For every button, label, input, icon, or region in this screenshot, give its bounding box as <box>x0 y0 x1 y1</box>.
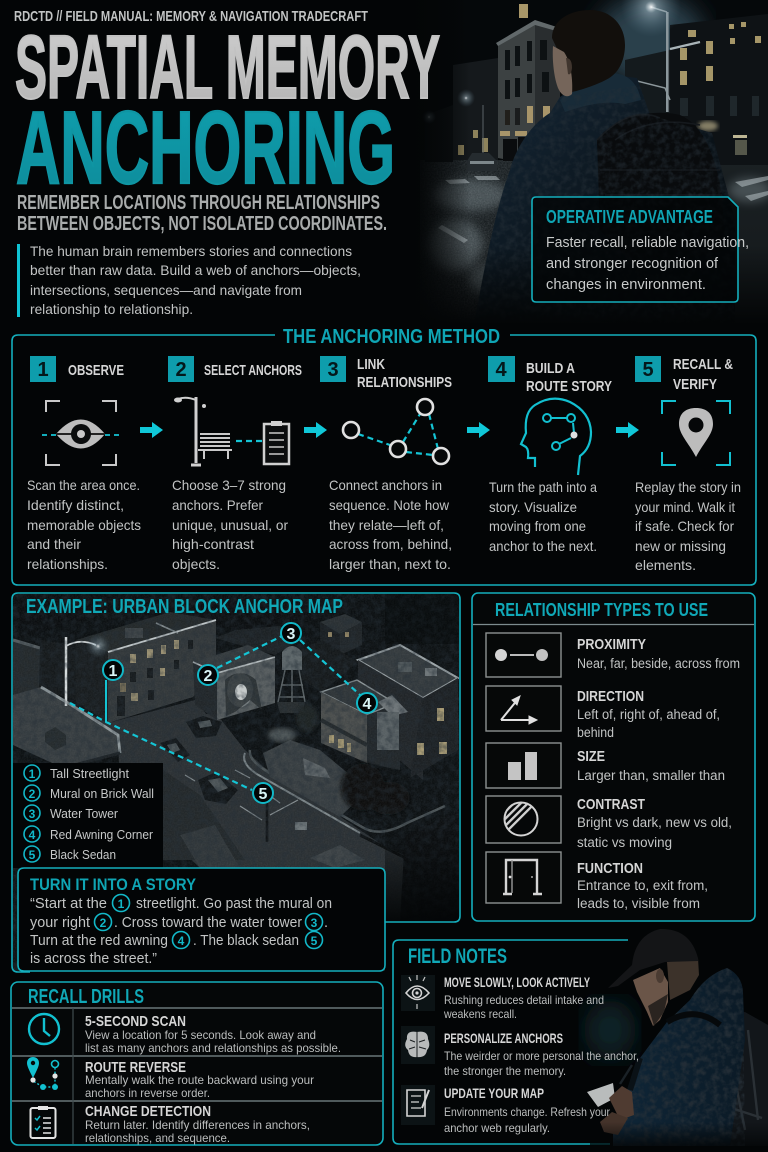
story callout: 2 <box>100 916 107 930</box>
step 3: link relationships: 3 <box>327 359 339 381</box>
title: ANCHORING <box>16 90 395 205</box>
step 5: recall and verify: 5 <box>642 359 654 381</box>
drill: change detection: Return later. Identify differences in anchors, <box>85 1118 310 1132</box>
head <box>552 10 625 92</box>
row: contrast: static vs moving <box>577 835 672 850</box>
story callout: 3 <box>311 916 318 930</box>
story callout: 4 <box>178 934 185 948</box>
story callout: “Start at the <box>30 896 107 912</box>
icon: linked nodes <box>343 399 449 464</box>
map route overlay <box>70 623 377 803</box>
operative figure <box>480 77 729 304</box>
panel: relationship types to use: RELATIONSHIP TYPES TO USE <box>495 600 708 620</box>
icon: clock <box>29 1014 59 1044</box>
callout: operative advantage <box>532 197 749 302</box>
icon: head with route <box>521 399 591 475</box>
row: proximity: Near, far, beside, across from <box>577 656 740 671</box>
hero photo: operative on night street <box>410 0 768 325</box>
notebook and hands <box>587 1083 615 1107</box>
subtitle: REMEMBER LOCATIONS THROUGH RELATIONSHIPS <box>17 192 380 214</box>
map: back buildings <box>13 594 300 640</box>
note: update your map: UPDATE YOUR MAP <box>444 1085 544 1101</box>
arrow <box>140 422 163 438</box>
panel: field notes: FIELD NOTES <box>408 945 507 968</box>
drill: route reverse <box>27 1057 314 1100</box>
story callout: streetlight. Go past the mural on <box>136 896 332 912</box>
map legend: Water Tower <box>50 806 119 821</box>
step 4: build a route story: moving from one <box>489 518 586 534</box>
field photo: operative with notebook <box>584 929 768 1152</box>
step 5: recall and verify <box>635 356 741 573</box>
callout: operative advantage: and stronger recognition of <box>546 256 719 272</box>
step 3: link relationships: Connect anchors in <box>329 477 442 493</box>
right buildings <box>670 14 768 165</box>
note: move slowly: MOVE SLOWLY, LOOK ACTIVELY <box>444 974 590 990</box>
jacket <box>613 968 745 1146</box>
step 3: link relationships: sequence. Note how <box>329 497 450 513</box>
row: function <box>486 852 708 911</box>
note: update your map: Environments change. Refresh your <box>444 1105 610 1119</box>
row: direction <box>486 686 720 740</box>
intro text block: better than raw data. Build a web of anchors—objects, <box>30 262 361 278</box>
note: personalize anchors: The weirder or more personal the anchor, <box>444 1049 639 1063</box>
map legend: Red Awning Corner <box>50 827 154 842</box>
drill: 5-second scan: list as many anchors and relationships as possible. <box>85 1041 341 1055</box>
note: update your map <box>401 1085 610 1135</box>
story callout: 1 <box>118 897 125 911</box>
story callout: is across the street.” <box>30 951 157 967</box>
drill: route reverse: anchors in reverse order. <box>85 1086 210 1100</box>
panel: recall drills <box>11 982 383 1145</box>
panel: the anchoring method <box>12 326 756 585</box>
row: function: Entrance to, exit from, <box>577 878 708 893</box>
title <box>15 18 440 205</box>
step 3: link relationships: LINK <box>357 356 385 373</box>
map route overlay: 3 <box>287 626 296 643</box>
map route overlay: 4 <box>363 696 372 713</box>
icon: eye in viewfinder <box>42 401 120 465</box>
icon: brain <box>401 1026 435 1064</box>
map legend: 4 <box>29 828 36 842</box>
panel: field notes <box>393 929 768 1152</box>
central building <box>498 22 535 165</box>
street <box>438 160 768 289</box>
map: courtyard <box>263 740 352 817</box>
icon: checklist clipboard <box>30 1106 56 1138</box>
map legend: 1 <box>29 767 36 781</box>
step 4: build a route story: 4 <box>495 359 507 381</box>
row: size <box>486 743 725 788</box>
map legend: Tall Streetlight <box>50 766 129 781</box>
step 2: select anchors <box>168 356 302 572</box>
step 3: link relationships: across from, behind, <box>329 536 452 552</box>
row: contrast: Bright vs dark, new vs old, <box>577 815 732 830</box>
row: function: leads to, visible from <box>577 896 700 911</box>
step 5: recall and verify: new or missing <box>635 538 726 554</box>
map legend <box>13 763 163 868</box>
icon: eye <box>401 975 435 1011</box>
callout: operative advantage: changes in environment. <box>546 277 706 293</box>
intro text block: relationship to relationship. <box>30 301 193 317</box>
story callout: 5 <box>311 934 318 948</box>
method heading: THE ANCHORING METHOD <box>283 326 500 348</box>
drill: change detection <box>30 1103 310 1145</box>
map legend: 3 <box>29 807 36 821</box>
story callout <box>18 868 385 971</box>
step 1: observe: 1 <box>37 359 49 381</box>
story callout: . Cross toward the water tower <box>114 915 302 931</box>
arrow <box>467 422 490 438</box>
panel: example urban block anchor map <box>12 593 460 972</box>
map legend: 2 <box>29 787 36 801</box>
drill: route reverse: ROUTE REVERSE <box>85 1059 186 1076</box>
step 1: observe: memorable objects <box>27 517 141 533</box>
head and cap <box>667 958 699 1000</box>
arrow <box>304 422 327 438</box>
step 3: link relationships: they relate—left of, <box>329 517 444 533</box>
story callout: . <box>324 915 328 931</box>
step 2: select anchors: high-contrast <box>172 536 254 552</box>
drill: 5-second scan: 5-SECOND SCAN <box>85 1013 186 1030</box>
step 1: observe: OBSERVE <box>68 362 124 379</box>
story callout: . The black sedan <box>193 933 299 949</box>
backpack <box>597 112 722 196</box>
map: building with streetlight <box>76 612 216 652</box>
intro text block: intersections, sequences—and navigate from <box>30 282 302 298</box>
note: update your map: anchor web regularly. <box>444 1121 550 1135</box>
intro text block <box>17 243 361 317</box>
step 1: observe: relationships. <box>27 556 108 572</box>
row: proximity <box>486 633 740 677</box>
arrow <box>616 422 639 438</box>
left buildings <box>453 58 498 160</box>
car <box>467 153 497 171</box>
note: personalize anchors: the stronger the memory. <box>444 1064 566 1078</box>
map route overlay: 5 <box>259 786 268 803</box>
callout: operative advantage: Faster recall, reliable navigation, <box>546 235 749 251</box>
step 2: select anchors: SELECT ANCHORS <box>204 362 302 379</box>
step 4: build a route story: BUILD A <box>526 360 575 377</box>
step 1: observe: Scan the area once. <box>27 477 140 493</box>
map route overlay: 1 <box>109 663 118 680</box>
step 1: observe <box>27 356 141 572</box>
row: size: Larger than, smaller than <box>577 768 725 783</box>
map: road <box>84 700 385 870</box>
step 2: select anchors: Choose 3–7 strong <box>172 477 286 493</box>
map: cars <box>160 716 238 804</box>
step 4: build a route story: anchor to the next. <box>489 538 597 554</box>
step 3: link relationships: RELATIONSHIPS <box>357 374 452 391</box>
story callout: your right <box>30 915 90 931</box>
note: personalize anchors: PERSONALIZE ANCHORS <box>444 1030 563 1046</box>
icon: map pin in viewfinder <box>662 401 730 465</box>
note: move slowly <box>401 974 604 1021</box>
drill: change detection: relationships, and sequence. <box>85 1131 230 1145</box>
map: lower-left roof block <box>13 687 120 768</box>
step 4: build a route story: story. Visualize <box>489 499 577 515</box>
street lamp <box>666 12 669 112</box>
row: direction: behind <box>577 725 614 740</box>
step 2: select anchors: anchors. Prefer <box>172 497 263 513</box>
map legend: 5 <box>29 848 36 862</box>
note: personalize anchors <box>401 1026 639 1078</box>
step 1: observe: and their <box>27 536 81 552</box>
drill: route reverse: Mentally walk the route backward using your <box>85 1073 314 1087</box>
panel: relationship types to use <box>472 593 755 921</box>
note: move slowly: Rushing reduces detail intake and <box>444 993 604 1007</box>
drill: 5-second scan: View a location for 5 seconds. Look away and <box>85 1028 316 1042</box>
map: water tower <box>282 646 302 670</box>
row: size: SIZE <box>577 748 605 765</box>
icon: notepad <box>401 1085 435 1125</box>
step 4: build a route story: ROUTE STORY <box>526 378 612 395</box>
row: contrast: CONTRAST <box>577 796 645 813</box>
story callout: Turn at the red awning <box>30 933 168 949</box>
row: function: FUNCTION <box>577 860 643 877</box>
icon: streetlight, bench, clipboard <box>174 397 289 465</box>
map: mural building <box>216 645 274 672</box>
map: trees <box>341 763 410 815</box>
row: direction: DIRECTION <box>577 688 644 705</box>
callout: operative advantage: OPERATIVE ADVANTAGE <box>546 207 713 227</box>
step 2: select anchors: objects. <box>172 556 220 572</box>
step 5: recall and verify: Replay the story in <box>635 479 741 495</box>
step 4: build a route story <box>488 356 612 554</box>
subtitle: BETWEEN OBJECTS, NOT ISOLATED COORDINATES. <box>17 213 387 235</box>
intro text block: The human brain remembers stories and connections <box>30 243 352 259</box>
row: proximity: PROXIMITY <box>577 636 646 653</box>
map route overlay: 2 <box>204 668 213 685</box>
drill: 5-second scan <box>29 1013 341 1055</box>
step 5: recall and verify: if safe. Check for <box>635 518 734 534</box>
step 5: recall and verify: RECALL & <box>673 356 733 373</box>
backpack <box>732 1012 768 1140</box>
map: lamp posts <box>66 637 96 706</box>
step 2: select anchors: 2 <box>175 359 187 381</box>
map legend: Black Sedan <box>50 847 116 862</box>
row: contrast <box>486 796 732 850</box>
step 5: recall and verify: your mind. Walk it <box>635 499 735 515</box>
drill: change detection: CHANGE DETECTION <box>85 1103 211 1120</box>
note: move slowly: weakens recall. <box>443 1007 517 1021</box>
step 5: recall and verify: elements. <box>635 557 696 573</box>
map legend: Mural on Brick Wall <box>50 786 154 801</box>
subtitle <box>17 192 387 235</box>
icon: route pins <box>27 1057 58 1090</box>
header eyebrow: RDCTD // FIELD MANUAL: MEMORY & NAVIGATION TRADECRAFT <box>14 8 368 25</box>
map: right buildings <box>358 645 458 698</box>
map heading: EXAMPLE: URBAN BLOCK ANCHOR MAP <box>26 596 343 618</box>
row: direction: Left of, right of, ahead of, <box>577 707 720 722</box>
panel: recall drills: RECALL DRILLS <box>28 986 144 1008</box>
step 5: recall and verify: VERIFY <box>673 376 717 393</box>
step 3: link relationships: larger than, next to. <box>329 556 451 572</box>
story callout: TURN IT INTO A STORY <box>30 875 197 894</box>
step 3: link relationships <box>320 356 452 572</box>
step 1: observe: Identify distinct, <box>27 497 124 513</box>
step 2: select anchors: unique, unusual, or <box>172 517 288 533</box>
step 4: build a route story: Turn the path into a <box>489 479 597 495</box>
